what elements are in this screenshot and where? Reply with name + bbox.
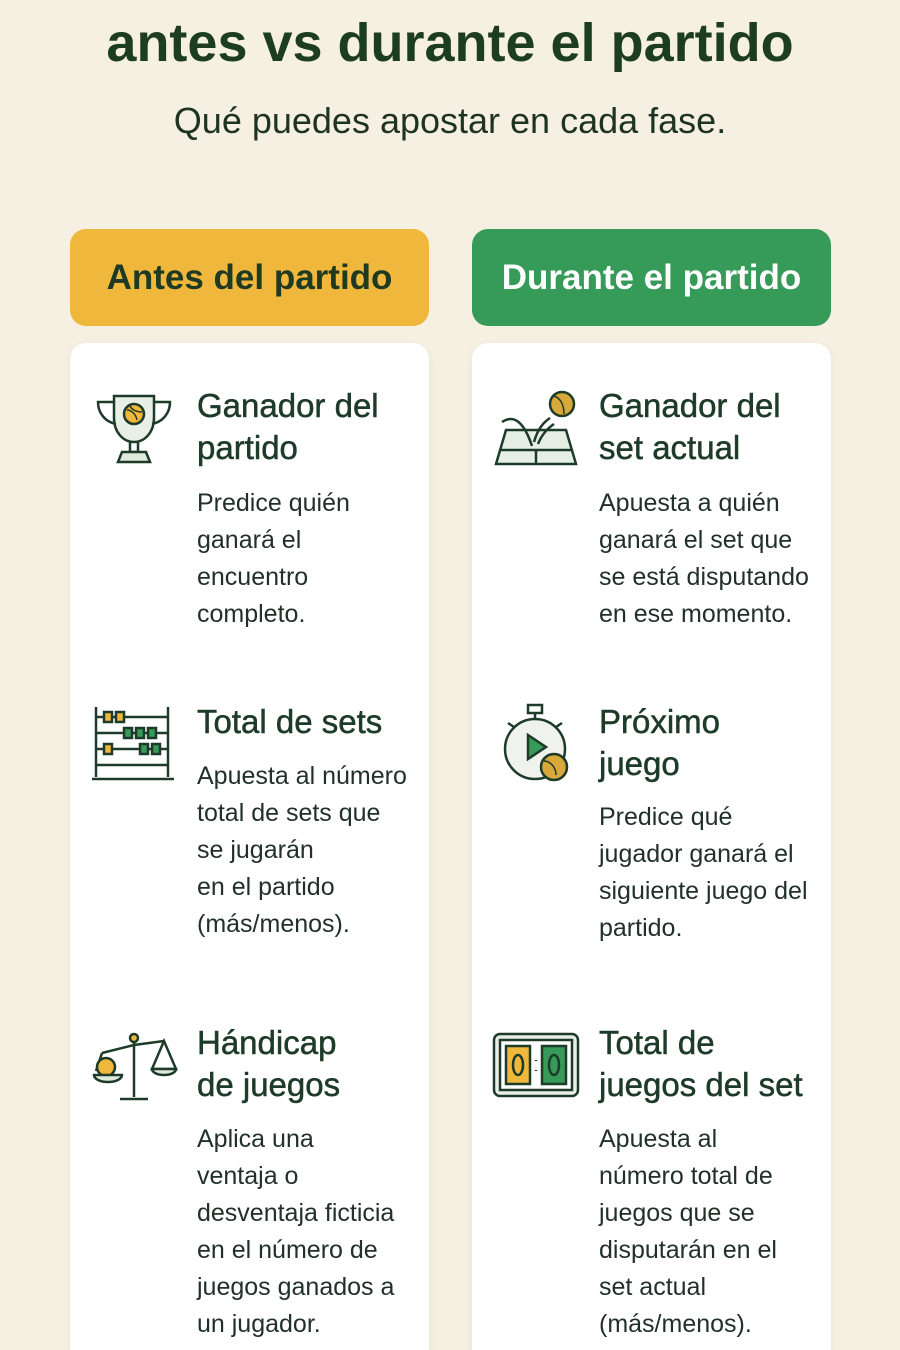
icon: trophy xyxy=(96,394,172,464)
heading: ganador del set actual: set actual xyxy=(599,429,740,466)
header: antes: Antes del partido xyxy=(107,258,392,296)
heading: proximo juego: Próximo xyxy=(599,703,720,740)
text: juegos ganados a xyxy=(197,1273,394,1301)
heading: total de juegos del set: Total de xyxy=(599,1024,715,1061)
text xyxy=(197,489,350,628)
text: jugador ganará el xyxy=(599,840,794,868)
text: en el número de xyxy=(197,1236,378,1264)
text: siguiente juego del xyxy=(599,877,808,905)
text: un jugador. xyxy=(197,1310,321,1338)
text: disputarán en el xyxy=(599,1236,777,1264)
text: Predice qué xyxy=(599,803,732,831)
text: partido. xyxy=(599,914,682,942)
header: antes xyxy=(70,229,429,326)
text xyxy=(197,762,407,938)
heading: ganador del partido xyxy=(197,387,379,466)
text xyxy=(196,1125,394,1338)
text: ganará el set que xyxy=(599,526,792,554)
title: antes vs durante el partido xyxy=(106,13,794,73)
heading: total de juegos del set xyxy=(598,1024,803,1104)
heading: ganador del partido: Ganador del xyxy=(197,387,379,424)
heading: handicap: de juegos xyxy=(197,1066,340,1103)
header: durante: Durante el partido xyxy=(502,258,801,296)
text: ganará el xyxy=(197,526,301,554)
text: encuentro xyxy=(197,563,308,591)
icon: scale xyxy=(92,1032,178,1100)
heading: handicap: Hándicap xyxy=(197,1024,336,1061)
heading: ganador del set actual xyxy=(599,387,781,466)
heading: proximo juego xyxy=(598,703,720,782)
text: total de sets que xyxy=(197,799,380,827)
subtitle: Qué puedes apostar en cada fase. xyxy=(174,100,726,141)
text: completo. xyxy=(197,600,305,628)
icon: stopwatch xyxy=(504,704,568,782)
text xyxy=(599,489,809,628)
text: (más/menos). xyxy=(197,910,350,938)
text: ventaja o xyxy=(197,1162,298,1190)
heading: ganador del set actual: Ganador del xyxy=(599,387,781,424)
text: en el partido xyxy=(197,873,335,901)
text: número total de xyxy=(599,1162,773,1190)
text: Apuesta a quién xyxy=(599,489,780,517)
heading: ganador del partido: partido xyxy=(197,429,298,466)
text: Aplica una xyxy=(197,1125,314,1153)
text: juegos que se xyxy=(599,1199,755,1227)
text: Predice quién xyxy=(197,489,350,517)
text xyxy=(598,803,808,942)
heading: total de sets: Total de sets xyxy=(197,703,382,740)
text: set actual xyxy=(599,1273,706,1301)
text: Apuesta al número xyxy=(197,762,407,790)
text: (más/menos). xyxy=(599,1310,752,1338)
icon: abacus xyxy=(92,707,174,780)
panel: durante xyxy=(472,343,831,1350)
text: Apuesta al xyxy=(599,1125,717,1153)
text: se jugarán xyxy=(197,836,314,864)
text xyxy=(598,1125,777,1338)
text: desventaja ficticia xyxy=(197,1199,394,1227)
heading: proximo juego: juego xyxy=(599,745,680,782)
icon: scoreboard xyxy=(492,1032,580,1098)
heading: handicap xyxy=(197,1024,340,1104)
icon: court with ball xyxy=(494,390,578,466)
header: durante xyxy=(472,229,831,326)
text: en ese momento. xyxy=(599,600,792,628)
heading: total de juegos del set: juegos del set xyxy=(599,1066,803,1103)
panel: antes xyxy=(70,343,429,1350)
text: se está disputando xyxy=(599,563,809,591)
